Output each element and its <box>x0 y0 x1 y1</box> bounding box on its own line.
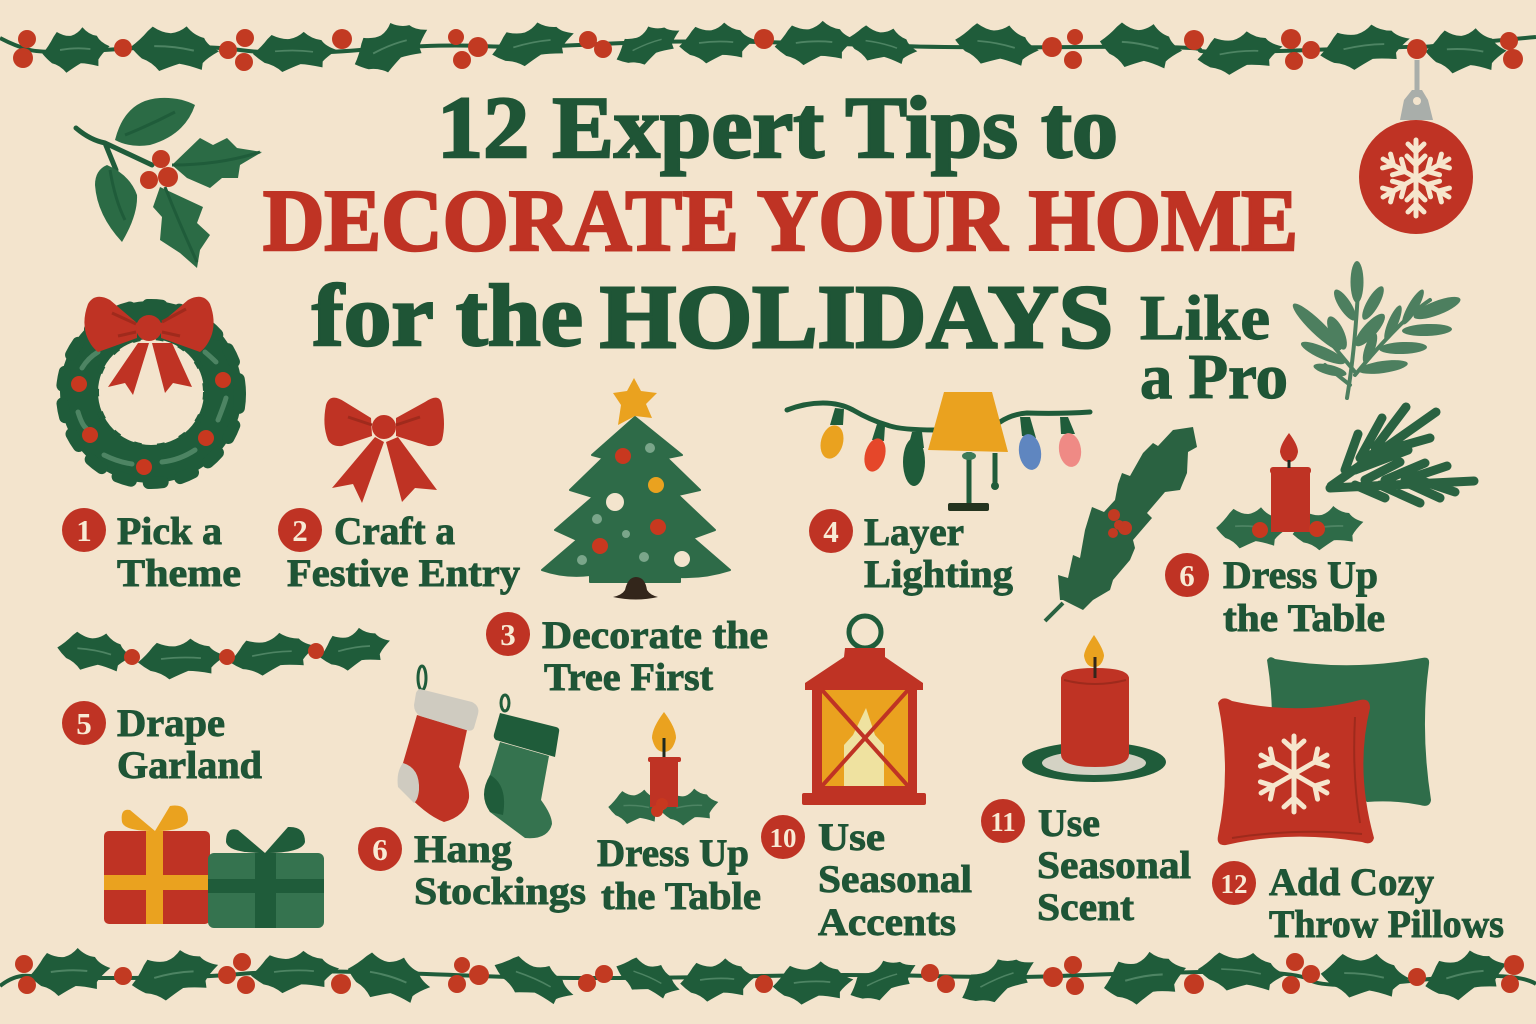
number badge 3 <box>486 612 530 656</box>
number badge 6: 6 <box>1179 558 1195 593</box>
tip 6: dress up the table (candle) <box>1165 407 1474 640</box>
icon: pillows <box>1218 657 1431 845</box>
number badge 12 <box>1212 861 1256 905</box>
label: Hang <box>414 828 513 871</box>
label: Add Cozy <box>1269 861 1434 904</box>
label <box>818 816 972 944</box>
label <box>287 510 521 595</box>
title: 12 Expert Tips to <box>437 80 1118 177</box>
number badge 2: 2 <box>292 513 308 548</box>
tip 5: drape garland <box>54 624 393 787</box>
icon: holly branch top left <box>76 98 262 268</box>
number badge 6 <box>1165 553 1209 597</box>
label: Stockings <box>414 870 586 913</box>
icon: candle with branch <box>1214 407 1474 553</box>
title: HOLIDAYS <box>600 268 1113 367</box>
tip 10: use seasonal accents <box>761 616 972 944</box>
number badge 1 <box>62 508 106 552</box>
icon: gift boxes <box>104 806 324 928</box>
label: Dress Up <box>597 832 749 875</box>
icon: lantern <box>802 616 926 805</box>
number badge 11 <box>981 799 1025 843</box>
label: Seasonal <box>818 858 972 901</box>
number badge 1: 1 <box>76 513 92 548</box>
label: Layer <box>864 511 964 554</box>
label: Use <box>818 816 885 859</box>
label <box>1269 861 1504 946</box>
icon: christmas tree <box>542 378 730 600</box>
label: Craft a <box>334 510 455 553</box>
number badge 10 <box>761 815 805 859</box>
title: DECORATE YOUR HOME <box>263 173 1298 270</box>
number badge 6: 6 <box>372 832 388 867</box>
label: Seasonal <box>1037 844 1191 887</box>
top holly garland <box>0 12 1536 82</box>
number badge 4: 4 <box>823 514 839 549</box>
label: Drape <box>117 702 225 745</box>
icon: green sprig right of title <box>1288 261 1463 398</box>
tip 3: decorate the tree first <box>486 378 768 699</box>
number badge 11: 11 <box>990 807 1016 837</box>
title <box>263 80 1298 412</box>
icon: bow <box>324 398 444 503</box>
number badge 5 <box>62 701 106 745</box>
number badge 3: 3 <box>500 617 516 652</box>
label: Throw Pillows <box>1269 903 1504 946</box>
bottom holly garland <box>0 942 1536 1015</box>
label: Lighting <box>864 553 1014 596</box>
label <box>597 832 761 918</box>
icon: candle on plate <box>1022 635 1166 782</box>
tip 12: add cozy throw pillows <box>1212 657 1504 946</box>
label <box>542 614 768 699</box>
label <box>414 828 586 913</box>
tip 4: layer lighting <box>787 392 1090 596</box>
label: Theme <box>117 552 241 595</box>
label <box>117 510 241 595</box>
label: the Table <box>601 875 761 918</box>
label: Dress Up <box>1223 554 1378 597</box>
label: the Table <box>1223 597 1385 640</box>
title: for the <box>312 268 583 365</box>
label: Accents <box>818 901 956 944</box>
label <box>1223 554 1385 640</box>
number badge 6 <box>358 827 402 871</box>
label <box>864 511 1014 596</box>
icon: string lights and lamp <box>787 392 1090 511</box>
number badge 12: 12 <box>1220 869 1248 899</box>
icon: ornament <box>1359 60 1473 234</box>
icon: small candle <box>607 712 720 828</box>
number badge 5: 5 <box>76 706 92 741</box>
tip: dress up the table (small candle) <box>597 712 761 918</box>
label: Use <box>1038 802 1100 845</box>
label <box>117 702 262 787</box>
number badge 4 <box>809 509 853 553</box>
tip 11: use seasonal scent <box>981 635 1191 929</box>
number badge 10: 10 <box>770 823 796 853</box>
tip 2: craft a festive entry <box>278 398 521 595</box>
title: Like <box>1140 282 1270 353</box>
label <box>1037 802 1191 929</box>
tip 6: hang stockings <box>358 666 586 913</box>
icon: stockings <box>398 666 559 838</box>
tip 1: pick a theme <box>62 297 241 595</box>
label: Tree First <box>544 656 713 699</box>
icon: pine branch <box>1045 427 1197 621</box>
number badge 2 <box>278 508 322 552</box>
title: a Pro <box>1140 341 1288 412</box>
icon: garland <box>54 624 393 680</box>
label: Decorate the <box>542 614 768 657</box>
label: Pick a <box>117 510 222 553</box>
label: Scent <box>1037 886 1134 929</box>
icon: wreath <box>62 297 240 483</box>
label: Garland <box>117 744 262 787</box>
label: Festive Entry <box>287 552 521 595</box>
